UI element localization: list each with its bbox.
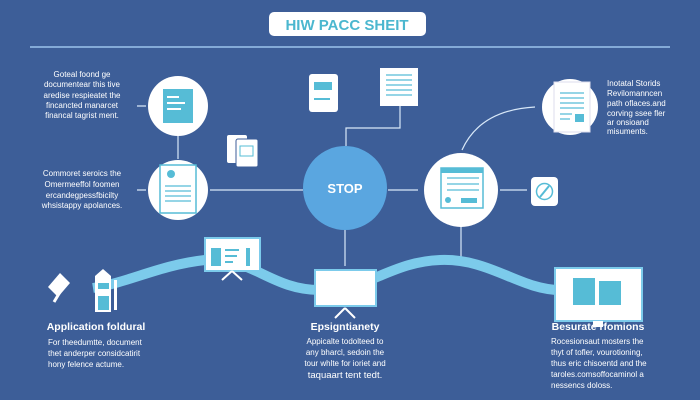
text block: bottom right: thyt of tofler, vourotioning, (551, 348, 643, 357)
text block: top left (44, 70, 121, 120)
text block: middle left: ercandegpessfbicilty (46, 191, 118, 200)
text block: bottom left: thet anderper considcatirit (48, 349, 141, 358)
text block: top left: fincancted manarcet (46, 101, 119, 110)
text block: bottom left: For theedumtte, document (48, 338, 143, 347)
icon: middle monitor (315, 270, 376, 318)
text block: bottom right: Rocesionsaut mosters the (551, 337, 644, 346)
text block: top right: corving ssee fler (607, 109, 666, 118)
circle: document 2 (148, 160, 208, 220)
text block: bottom middle: Epsigntianety (311, 321, 380, 333)
circle: checklist (542, 79, 598, 135)
text block: bottom middle: Appicalte todolteed to (307, 337, 384, 346)
icon: tablets (227, 135, 258, 167)
text block: middle left: whsistappy apolances. (41, 201, 122, 210)
circle: form (424, 153, 498, 227)
icon: left tools (48, 269, 117, 312)
text block: top right: path oflaces.and (607, 99, 666, 108)
circle: STOP (303, 146, 387, 230)
icon: document top (380, 68, 418, 106)
text block: bottom right: Besurate rfomions (552, 321, 645, 333)
text block: bottom middle: taquaart tent tedt. (308, 370, 382, 381)
icon: right monitor (555, 268, 642, 327)
text block: top left: aredise respieatet the (44, 91, 121, 100)
text block: bottom right: thus eric chisoentd and the (551, 359, 647, 368)
text block: bottom middle: tour whlte for ioriet and (304, 359, 386, 368)
icon: tablet top (309, 74, 338, 112)
text block: bottom right: nessencs doloss. (551, 381, 612, 390)
circle: STOP: STOP (327, 181, 363, 196)
text block: middle left (41, 169, 122, 210)
text block: middle left: Commoret seroics the (43, 169, 122, 178)
text block: top right (607, 79, 666, 136)
icon: compass (531, 177, 558, 206)
text block: top left: documentear this tive (44, 80, 121, 89)
text block: bottom middle (304, 321, 386, 381)
connectors (137, 105, 535, 266)
text block: top right: Inotatal Storids (607, 79, 660, 88)
text block: top right: ar onsioand (607, 118, 649, 127)
icon: presentation board (205, 238, 260, 280)
text block: bottom left: Application foldural (47, 321, 145, 333)
text block: bottom right: taroles.comsoffocaminol a (551, 370, 644, 379)
text block: top right: misuments. (607, 127, 648, 136)
title (269, 12, 426, 36)
text block: bottom left (47, 321, 145, 369)
text block: top left: Goteal foond ge (54, 70, 111, 79)
text block: top left: financal tagrist ment. (45, 111, 119, 120)
text block: top right: Revilomanncen (607, 89, 662, 98)
title: HIW PACC SHEIT (285, 17, 409, 34)
text block: middle left: Omermeeffol foomen (44, 180, 120, 189)
text block: bottom middle: any bharcl, sedoin the (306, 348, 385, 357)
wave (93, 260, 560, 290)
text block: bottom right (551, 321, 647, 390)
text block: bottom left: hony felence actume. (48, 360, 124, 369)
circle: document 1 (148, 76, 208, 136)
